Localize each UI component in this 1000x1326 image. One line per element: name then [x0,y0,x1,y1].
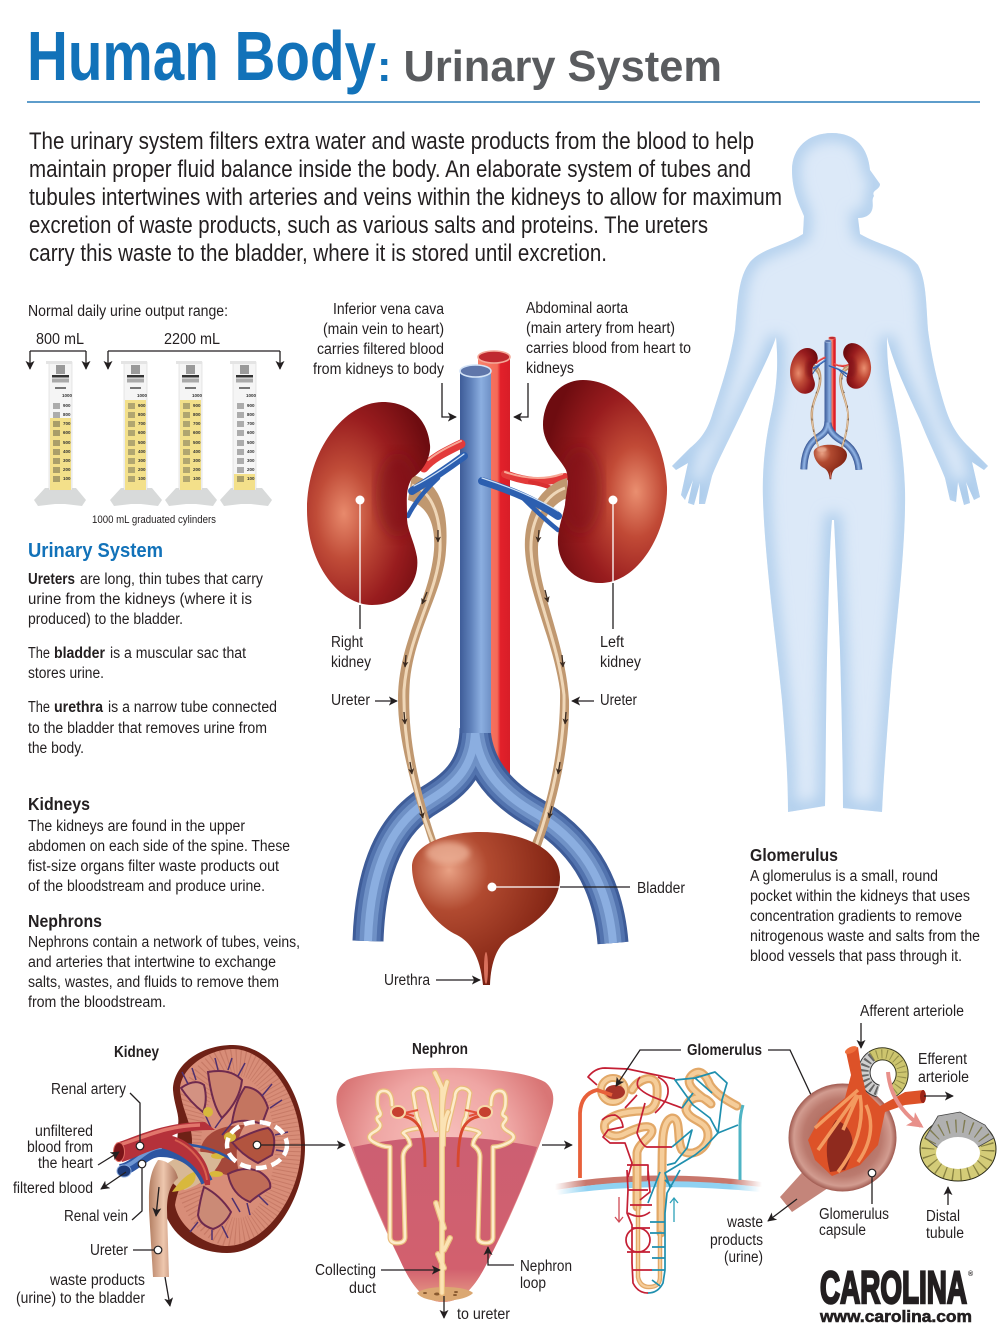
cylinder 4: 1000 [246,393,257,398]
label: filtered blood [13,1172,126,1197]
figure: miniature urinary system in body [790,337,871,479]
label: collecting duct: duct [349,1280,377,1297]
label: inferior vena cava [313,301,444,378]
cylinder 3: 900 [193,403,201,408]
tubule ring [864,1054,902,1091]
renal artery [114,1122,215,1185]
label: abdominal aorta: carries blood from heart to [526,340,691,357]
label: inferior vena cava: carries filtered blood [317,341,444,358]
cylinder 2: 900 [138,403,146,408]
text: glomerulus: Glomerulus [750,845,838,865]
heading: nephron: Nephron [412,1041,468,1058]
label: waste products: waste products [49,1272,145,1289]
label: glomerulus [616,1042,831,1136]
label: waste products urine: waste [726,1214,763,1231]
label: right ureter: Ureter [600,692,637,709]
bracket: 2200 mL [108,351,280,369]
ureter left [398,475,447,847]
label: collecting duct [315,1262,440,1297]
label: left kidney [600,634,641,671]
label: waste products urine [710,1214,763,1266]
label: right kidney: Right [331,634,364,651]
cylinder 2: 400 [138,449,146,454]
label: abdominal aorta: Abdominal aorta [526,300,628,317]
text: kidneys: The kidneys are found in the upper [28,818,245,835]
cylinder 4: 900 [247,403,255,408]
cylinder 3 [165,361,217,506]
blue capillaries [648,1072,738,1293]
text: bladder: is a muscular sac that [110,645,247,662]
label: renal artery [51,1081,144,1150]
text: nephrons: from the bloodstream. [28,994,166,1011]
renal pyramid [336,1068,553,1302]
cylinder 1: 1000 [62,393,73,398]
logo: Carolina: www.carolina.com [819,1307,972,1326]
cylinder 4: 800 [247,412,255,417]
label: distal tubule: Distal [926,1208,960,1225]
panel: kidney cross-section [13,1044,345,1307]
left kidney [543,380,667,583]
cylinder 2: 800 [138,412,146,417]
label: renal artery: Renal artery [51,1081,126,1098]
glomeruli and arterioles [391,1106,492,1167]
text: glomerulus [750,845,980,965]
panel: daily urine output [28,303,280,526]
cylinder 3: 100 [193,476,201,481]
text: glomerulus: A glomerulus is a small, round [750,868,938,885]
cylinder 1: 100 [63,476,71,481]
label: collecting duct: Collecting [315,1262,376,1279]
text: nephrons: Nephrons contain a network of tubes, veins, [28,934,300,951]
text: glomerulus: nitrogenous waste and salts from the [750,928,980,945]
aorta [478,351,510,776]
panel: nephron tubule network [555,1042,831,1293]
kidney ureter [149,1160,178,1277]
label: right kidney [331,634,371,671]
text: glomerulus: blood vessels that pass through it. [750,948,962,965]
label: waste products: (urine) to the bladder [16,1290,145,1307]
kidney body [166,1045,305,1253]
text: urethra: the body. [28,740,84,757]
cylinder 4: 700 [247,421,255,426]
vena cava [460,365,491,733]
renal vein [117,1143,232,1182]
cylinders caption: 1000 mL graduated cylinders [92,514,216,526]
cylinder 1: 300 [63,458,71,463]
bracket: 800 mL [30,351,86,369]
cylinder 1 [34,361,86,506]
label: left ureter [331,692,397,709]
cylinder 2: 600 [138,430,146,435]
label: nephron loop: Nephron [520,1258,572,1275]
dashed highlight circle [227,1122,287,1168]
pink flow arrow [888,1072,921,1126]
exit tube [780,1166,828,1212]
label: inferior vena cava: (main vein to heart) [323,321,444,338]
panel: glomerulus closeup [768,1003,996,1242]
cylinder 3: 700 [193,421,201,426]
cylinder 2: 300 [138,458,146,463]
cylinder 1: 800 [63,412,71,417]
cylinder 3: 200 [193,467,201,472]
cylinder 1: 500 [63,440,71,445]
cylinder 1: 900 [63,403,71,408]
arrow: waste out [768,1199,797,1221]
label: unfiltered blood: unfiltered [35,1123,93,1140]
text: urethra: The [28,699,50,716]
cylinder 2: 500 [138,440,146,445]
label: afferent arteriole: Afferent arteriole [860,1003,964,1020]
text: urethra: urethra [54,699,103,716]
text: nephrons [28,911,300,1011]
label: bladder: Bladder [637,880,685,897]
label: urethra: Urethra [384,972,430,989]
text: urethra [28,699,277,757]
label: left ureter: Ureter [331,692,370,709]
text: glomerulus: concentration gradients to remove [750,908,962,925]
logo: Carolina: ® [968,1270,974,1278]
text: nephrons: and arteries that intertwine to exchange [28,954,276,971]
pointer: left kidney [608,496,618,629]
hilum and fat [165,1107,236,1192]
label: glomerulus capsule [819,1169,889,1239]
text: nephrons: Nephrons [28,911,102,931]
text: urethra: is a narrow tube connected [108,699,277,716]
text: kidneys: of the bloodstream and produce urine. [28,878,265,895]
text: kidneys: Kidneys [28,794,90,814]
distal tubule [920,1112,996,1181]
cylinder 4: 400 [247,449,255,454]
cylinder 2 [110,361,162,506]
renal arteries [424,441,565,490]
label: to ureter [444,1296,510,1323]
arrow: vena cava [442,383,456,417]
label: nephron loop: loop [520,1275,546,1292]
label: renal vein: Renal vein [64,1208,128,1225]
cylinder 1: 600 [63,430,71,435]
label: waste products urine: products [710,1232,763,1249]
label: efferent arteriole: Efferent [918,1051,968,1068]
figure: human body silhouette [672,133,988,812]
arrow: aorta [514,383,528,417]
label: inferior vena cava: from kidneys to body [313,361,444,378]
label: urethra [384,972,480,989]
ureter right [525,478,569,849]
intro text: The urinary system filters extra water and waste products from the blood to help [29,128,754,155]
label: abdominal aorta: kidneys [526,360,574,377]
nephron labels [315,1247,572,1323]
intro text: maintain proper fluid balance inside the body. An elaborate system of tubes and [29,156,751,183]
label: to ureter: to ureter [457,1306,510,1323]
figure: urinary system anatomy [307,351,667,985]
label: waste products [16,1272,170,1307]
label: ureter: Ureter [90,1242,128,1259]
label: afferent arteriole [860,1003,964,1048]
tubules [369,1073,514,1293]
label: abdominal aorta: (main artery from heart) [526,320,675,337]
label: waste products urine: (urine) [724,1249,763,1266]
text: glomerulus: pocket within the kidneys that uses [750,888,970,905]
text: bladder [28,645,247,682]
label: abdominal aorta [526,300,691,377]
heading: kidney: Kidney [114,1044,159,1061]
text: ureters: are long, thin tubes that carry [80,571,263,588]
red capillaries [588,1068,682,1293]
capillary tuft [808,1045,926,1176]
iliac branches [368,728,613,943]
intro text: carry this waste to the bladder, where it is stored until excretion. [29,240,607,267]
label: inferior vena cava: Inferior vena cava [333,301,444,318]
text: urethra: to the bladder that removes urine from [28,720,267,737]
800 mL label: 800 mL [36,331,84,348]
cylinder 1: 200 [63,467,71,472]
label: left kidney: kidney [600,654,641,671]
cylinder 2: 200 [138,467,146,472]
cylinder 2: 700 [138,421,146,426]
cylinder 3: 600 [193,430,201,435]
text: nephrons: salts, wastes, and fluids to remove them [28,974,279,991]
cylinder 4: 100 [247,476,255,481]
bladder [412,832,560,985]
2200 mL label: 2200 mL [164,331,220,348]
cylinder 2: 1000 [137,393,148,398]
label: glomerulus capsule: Glomerulus [819,1206,889,1223]
text: ureters: Ureters [28,571,75,588]
renal veins [408,454,558,530]
label: unfiltered blood [27,1123,119,1172]
text: bladder: bladder [54,645,105,662]
label: bladder [488,880,685,897]
title [27,17,722,95]
kidney pyramids [181,1071,274,1229]
kidney labels [13,1081,170,1307]
cylinder 3: 1000 [192,393,203,398]
label: distal tubule [926,1187,964,1242]
intro text [29,128,782,267]
label: left kidney: Left [600,634,625,651]
label: ureter [90,1242,162,1259]
labels: anatomy [313,300,691,989]
pointer: right kidney [356,496,364,629]
cylinder 3: 400 [193,449,201,454]
collecting vessel [740,1105,743,1180]
text: kidneys: abdomen on each side of the spine. These [28,838,290,855]
kidney vessels fringe [182,1058,288,1240]
cylinder 3: 800 [193,412,201,417]
title: : Urinary System [377,42,722,91]
text: kidneys [28,794,290,895]
title: Human Body [27,17,376,95]
afferent vessel [580,1090,612,1178]
text: bladder: The [28,645,50,662]
label: renal vein [64,1160,146,1225]
cylinder 3: 500 [193,440,201,445]
label: glomerulus: Glomerulus [687,1042,762,1059]
flow arrows [615,1197,678,1222]
cylinder 3: 300 [193,458,201,463]
cylinder 4 [220,361,272,506]
urine output heading: Normal daily urine output range: [28,303,228,320]
text: ureters: urine from the kidneys (where it is [28,591,252,608]
label: glomerulus capsule: capsule [819,1222,866,1239]
text: kidneys: fist-size organs filter waste products out [28,858,280,875]
label: efferent arteriole: arteriole [918,1069,969,1086]
label: right ureter [572,692,637,709]
pointer to tubule [542,1144,572,1146]
cylinder 2: 100 [138,476,146,481]
panel: nephron [315,1041,572,1323]
capsule [788,1084,896,1192]
heading: Urinary System: Urinary System [28,540,163,562]
label: unfiltered blood: the heart [38,1155,94,1172]
cylinder 1: 400 [63,449,71,454]
cylinder 4: 300 [247,458,255,463]
label: efferent arteriole [918,1051,969,1096]
label: filtered blood: filtered blood [13,1180,93,1197]
text: ureters: produced) to the bladder. [28,611,183,628]
label: distal tubule: tubule [926,1225,964,1242]
label: right kidney: kidney [331,654,371,671]
logo: Carolina [819,1262,974,1326]
cylinder 4: 200 [247,467,255,472]
right kidney [307,402,430,605]
text: ureters [28,571,263,628]
labels: closeup [768,1003,969,1242]
cylinder 4: 500 [247,440,255,445]
label: unfiltered blood: blood from [27,1139,93,1156]
cylinder 1: 700 [63,421,71,426]
cylinder 4: 600 [247,430,255,435]
pointer to nephron [253,1141,345,1149]
blood band [555,1175,762,1195]
label: nephron loop [488,1247,572,1292]
tubule [601,1072,737,1287]
intro text: tubules intertwines with arteries and veins within the kidneys to allow for maximum [29,184,782,211]
text: bladder: stores urine. [28,665,104,682]
intro text: excretion of waste products, such as various salts and proteins. The ureters [29,212,708,239]
